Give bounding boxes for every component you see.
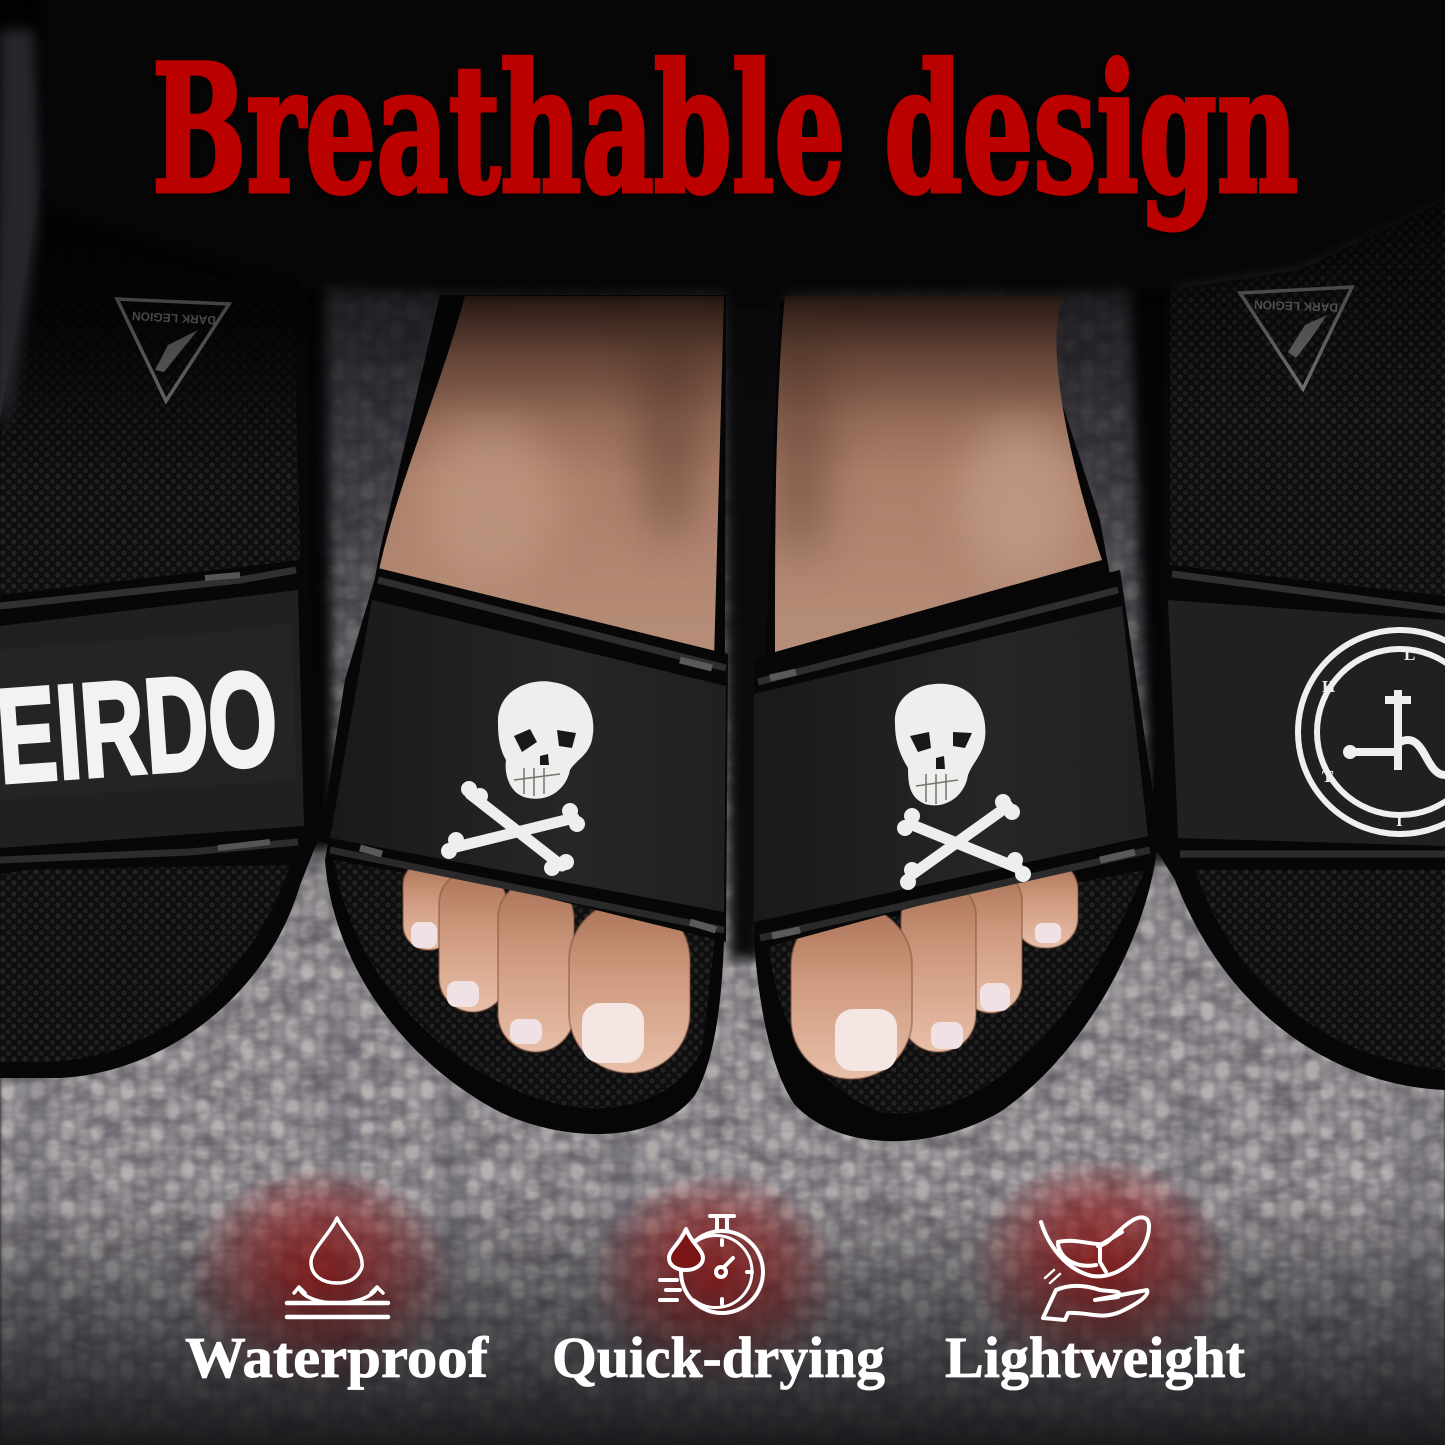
foot <box>775 296 1102 652</box>
toes <box>403 860 690 1073</box>
icon: skull and crossbones <box>895 684 1031 890</box>
icon: slide resting on hand <box>1041 1217 1149 1320</box>
feature: waterproof <box>185 1218 489 1390</box>
strap band <box>0 622 296 800</box>
strap <box>754 570 1160 950</box>
sole <box>325 295 726 1134</box>
icon: sigil seal: H <box>1322 677 1335 696</box>
top shade over scene <box>0 0 1445 420</box>
label: lightweight: Lightweight <box>945 1325 1246 1390</box>
icon: stopwatch with droplet <box>660 1216 763 1313</box>
left slide: WEIRDO <box>0 190 322 1078</box>
icon: triangle logo: DARK LEGION <box>1254 298 1338 314</box>
icon: water drop on surface <box>287 1218 388 1317</box>
red glow behind icons <box>185 1155 1230 1395</box>
dim rug strip at far left <box>0 30 42 440</box>
bottom dark fade <box>0 1190 1445 1445</box>
icon: sigil seal <box>1298 630 1445 834</box>
toes <box>791 860 1078 1079</box>
sole <box>754 300 1158 1141</box>
icon: sigil seal: T <box>1322 767 1334 786</box>
icon: triangle logo <box>1240 287 1352 389</box>
right slide: seal <box>1150 200 1445 1090</box>
strap <box>1160 565 1445 870</box>
feature: quick-drying <box>552 1216 885 1390</box>
feature: lightweight <box>945 1217 1246 1390</box>
strap <box>320 568 728 942</box>
label: waterproof: Waterproof <box>185 1325 489 1390</box>
icon: sigil seal: I <box>1396 811 1403 830</box>
icon: skull and crossbones <box>441 681 593 876</box>
strap lettering: EIRDO <box>0 644 282 812</box>
center-right slide with foot <box>754 296 1160 1141</box>
label: quick-drying: Quick-drying <box>552 1325 885 1390</box>
icon: sigil seal: L <box>1404 645 1415 664</box>
strap <box>0 562 308 874</box>
icon: triangle logo: DARK LEGION <box>132 309 216 327</box>
black cloth hem <box>42 0 1445 294</box>
center-left slide with foot <box>320 295 728 1134</box>
icon: triangle logo <box>117 299 229 401</box>
foot <box>378 296 724 660</box>
